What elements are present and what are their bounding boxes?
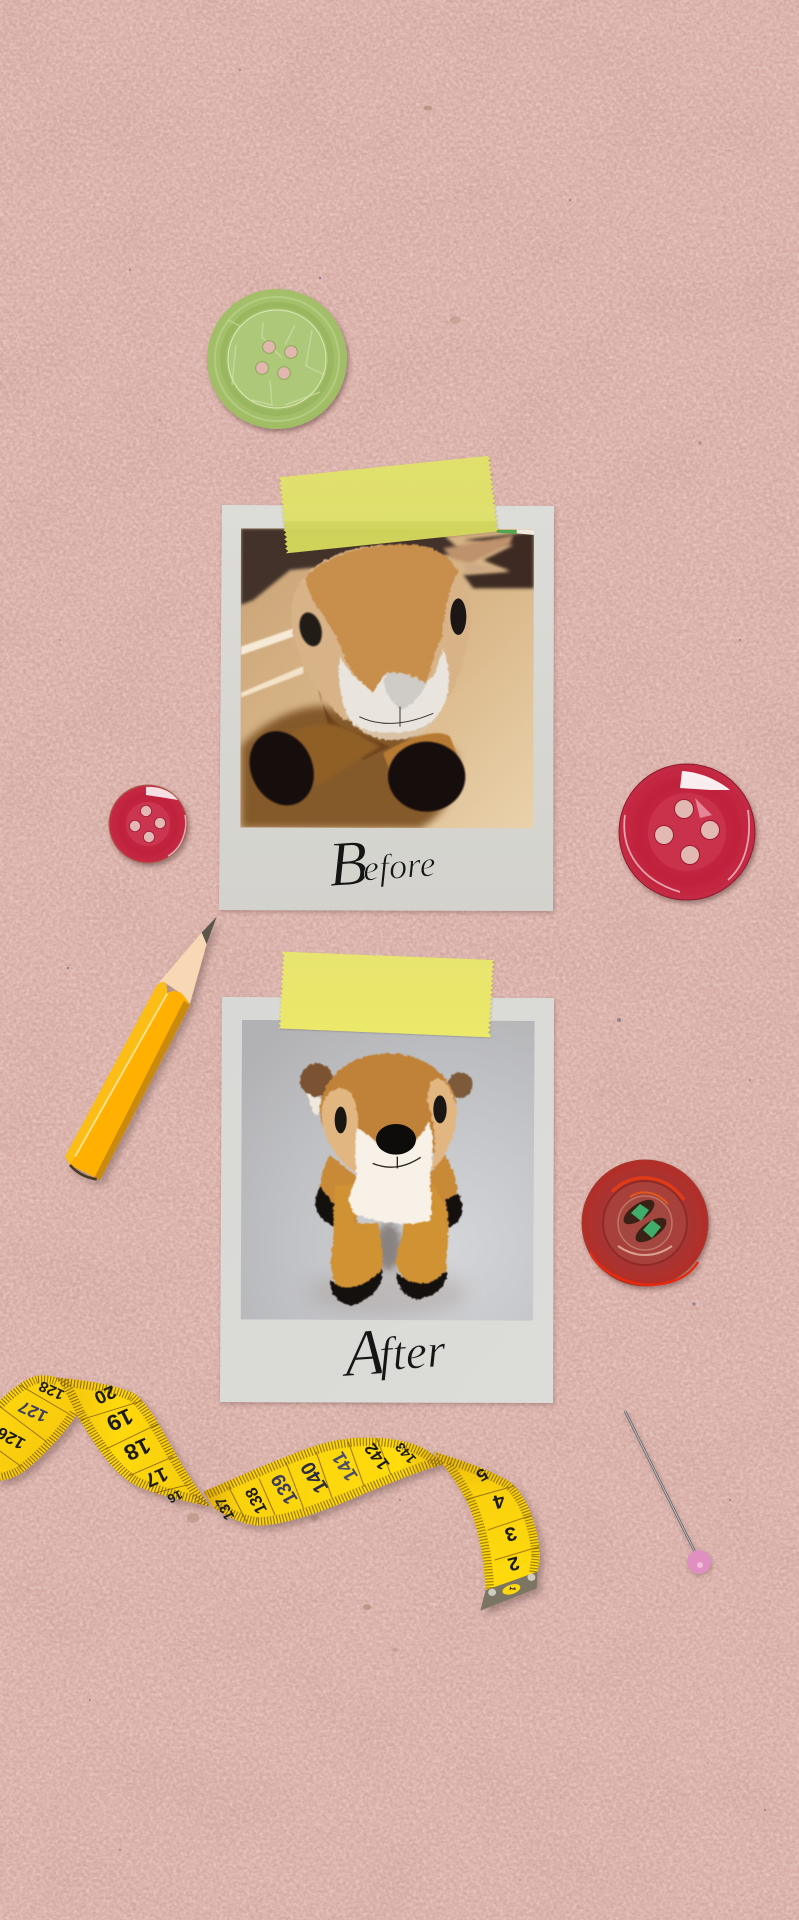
tape measure [0, 1373, 546, 1611]
pencil wood tip [158, 933, 207, 1003]
photo: repaired plush deer [238, 1018, 538, 1322]
tape segment: 5 to 2: 4 [490, 1489, 507, 1513]
tape segment: 20 to 16: 19 [102, 1403, 138, 1437]
caption: Before: B [326, 826, 370, 900]
tape segment: 137 to 143: 138 [241, 1485, 271, 1517]
tape segment: 5 to 2: 2 [505, 1552, 522, 1575]
tape end: metal tip [480, 1572, 537, 1611]
washi tape [278, 952, 495, 1037]
polaroid frame [220, 997, 554, 1403]
polaroid frame [219, 505, 554, 911]
pencil graphite [202, 917, 217, 944]
button: translucent red with green thread [582, 1160, 708, 1286]
caption: After: fter [377, 1324, 448, 1382]
photo: worn plush deer [237, 525, 537, 832]
tape segment: 128 to 126 [0, 1373, 82, 1483]
sewing pin [625, 1411, 711, 1574]
pencil body [65, 982, 190, 1180]
tape end: metal tip: 1 [507, 1586, 518, 1592]
tape segment: 20 to 16: 17 [141, 1463, 171, 1491]
tape segment: 128 to 126: 127 [15, 1397, 51, 1426]
photo card: before [219, 456, 554, 911]
tape segment: 5 to 2: 3 [502, 1522, 519, 1545]
tape segment: 20 to 16: 16 [165, 1487, 185, 1506]
tape segment: 137 to 143: 143 [391, 1440, 419, 1467]
caption: After: A [338, 1315, 388, 1391]
tape segment: 20 to 16: 18 [120, 1433, 155, 1466]
tape segment: 137 to 143: 137 [213, 1494, 239, 1522]
pencil [65, 917, 217, 1180]
tape segment: 137 to 143: 139 [266, 1470, 303, 1508]
tape segment: 20 to 16: 20 [91, 1382, 120, 1408]
tape segment: 137 to 143: 140 [297, 1458, 333, 1497]
tape segment: 137 to 143: 142 [360, 1440, 394, 1474]
tape segment: 128 to 126: 128 [36, 1377, 67, 1403]
button: large red [619, 764, 755, 900]
photo card: after [220, 952, 554, 1403]
button: small red [109, 785, 187, 863]
button: green [207, 289, 347, 429]
tape segment: 137 to 143 [200, 1433, 450, 1530]
washi tape [278, 456, 499, 553]
tape segment: 20 to 16 [54, 1375, 214, 1508]
tape segment: 5 to 2 [429, 1447, 546, 1597]
tape segment: 5 to 2: 5 [472, 1464, 492, 1486]
caption: Before: efore [362, 844, 437, 889]
tape segment: 137 to 143: 141 [327, 1449, 362, 1485]
